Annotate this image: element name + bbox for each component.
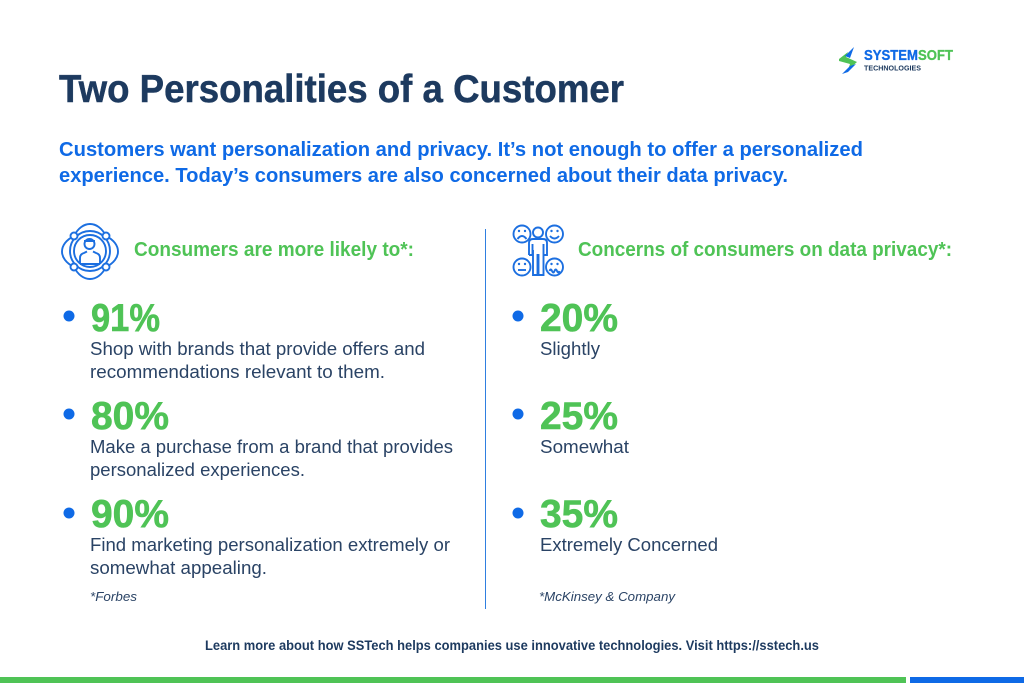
- logo tagline: TECHNOLOGIES: [864, 64, 921, 72]
- item: 91%: 91%: [91, 297, 160, 340]
- footer bar: green: [0, 677, 906, 683]
- item: 35%: 35%: [540, 493, 618, 536]
- item: 20%: Slightly: [540, 339, 600, 359]
- item: 25%: [512, 395, 629, 457]
- intro text: [59, 139, 863, 187]
- item: 25%: Somewhat: [540, 437, 629, 457]
- item: 35%: Extremely Concerned: [540, 535, 718, 555]
- icon: person in orbit: [62, 224, 118, 279]
- item: 80%: Make a purchase from a brand that provides: [90, 437, 453, 457]
- item: 90%: 90%: [91, 493, 169, 536]
- panel: consumers are more likely to: [62, 224, 453, 604]
- heading: Consumers are more likely to*:: [134, 239, 414, 261]
- item: 91%: [64, 297, 425, 382]
- footer bar: blue: [910, 677, 1024, 683]
- item: 80%: personalized experiences.: [90, 460, 305, 480]
- item: 90%: [64, 493, 450, 578]
- intro text: experience. Today’s consumers are also concerned about their data privacy.: [59, 165, 788, 187]
- logo: SystemSoft Technologies: [839, 47, 953, 74]
- footer call to action: Learn more about how SSTech helps companies use innovative technologies. Visit https://sstech.us: [205, 637, 819, 653]
- icon: logo bolt: [839, 47, 857, 74]
- item: 20%: [512, 297, 618, 359]
- source note: *Forbes: [90, 589, 138, 604]
- item: 91%: recommendations relevant to them.: [90, 362, 385, 382]
- item: 90%: somewhat appealing.: [90, 558, 267, 578]
- item: 35%: [512, 493, 718, 555]
- item: 80%: 80%: [91, 395, 169, 438]
- item: 90%: Find marketing personalization extremely or: [90, 535, 450, 555]
- item: 80%: [64, 395, 453, 480]
- intro text: Customers want personalization and privacy. It’s not enough to offer a personalized: [59, 139, 863, 161]
- heading: Concerns of consumers on data privacy*:: [578, 239, 952, 261]
- panel: concerns of consumers: [512, 226, 952, 604]
- item: 25%: 25%: [540, 395, 618, 438]
- icon: person with emotion faces: [514, 226, 563, 276]
- source note: *McKinsey & Company: [539, 589, 677, 604]
- title: Two Personalities of a Customer: [59, 68, 624, 111]
- logo wordmark: SYSTEMSOFT: [864, 48, 953, 64]
- item: 20%: 20%: [540, 297, 618, 340]
- item: 91%: Shop with brands that provide offers and: [90, 339, 425, 359]
